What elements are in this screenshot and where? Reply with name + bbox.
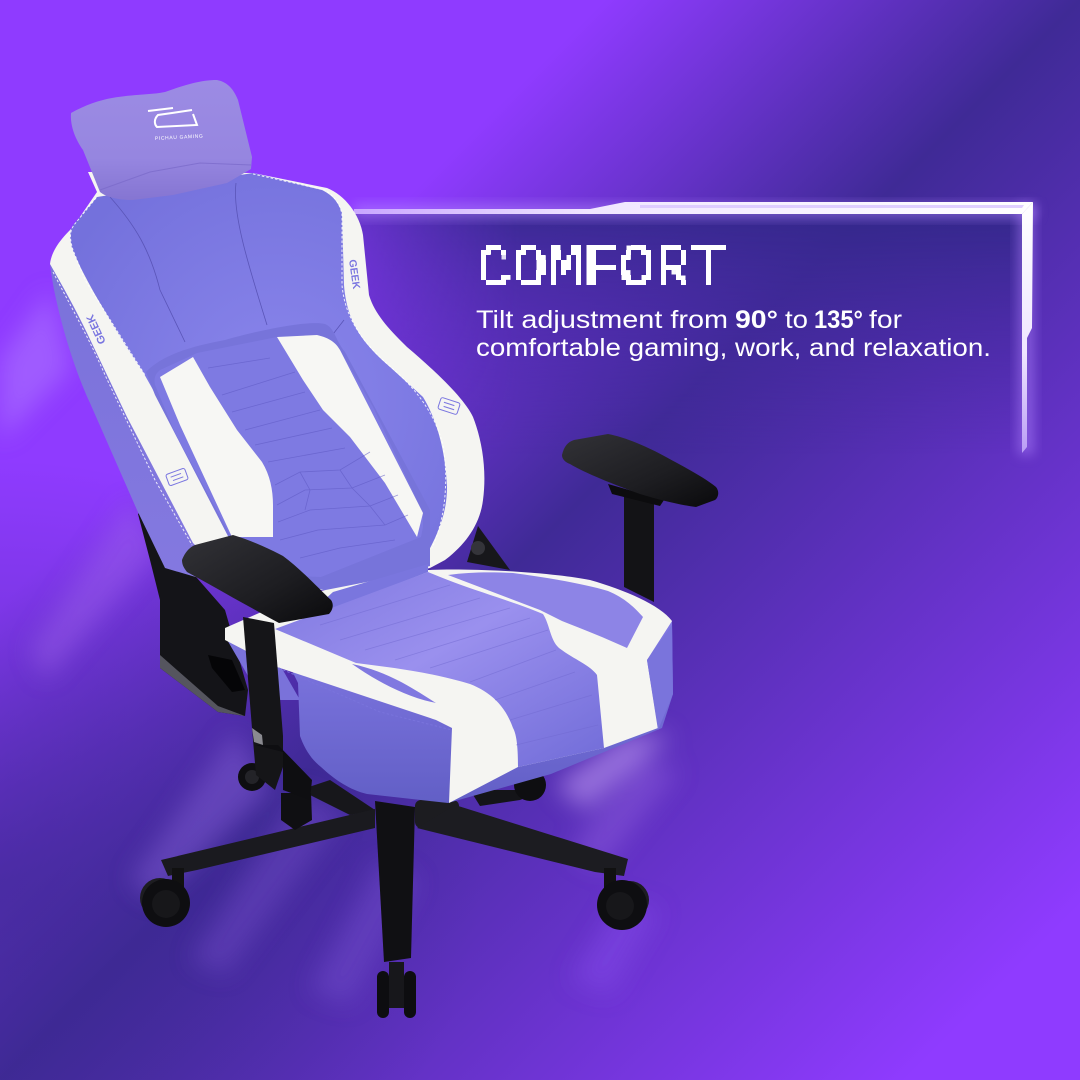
- chair: [50, 80, 718, 1018]
- GEEK label left: GEEK: [85, 312, 109, 346]
- title: COMFORT: [476, 237, 726, 305]
- rear leg: [300, 780, 375, 815]
- front leg: [375, 801, 415, 962]
- side stitching: [279, 668, 452, 730]
- seat side: [277, 621, 673, 803]
- right side panel: [647, 625, 673, 730]
- seat top white: [225, 569, 672, 803]
- GEEK label right: GEEK: [346, 259, 362, 290]
- description: 90°: [735, 306, 778, 334]
- icon: brand logo: [148, 108, 197, 127]
- description: comfortable gaming, work, and relaxation.: [476, 334, 991, 362]
- icon: logo badge right: [438, 397, 460, 415]
- white frame: [50, 172, 484, 590]
- mechanism under seat: [281, 793, 312, 830]
- rear tilt mechanism: [138, 503, 510, 716]
- left leg: [161, 809, 375, 876]
- left armrest: [182, 535, 333, 800]
- description: Tilt adjustment from: [476, 306, 728, 334]
- seat quilting: [320, 585, 598, 745]
- right leg: [417, 805, 628, 876]
- lumbar recess: [146, 323, 430, 592]
- backrest outer shell: [50, 264, 300, 590]
- seat right purple patch: [448, 572, 643, 648]
- text panel background: [356, 214, 1030, 396]
- brand text: PICHAU GAMING: [155, 133, 203, 142]
- back seams: [110, 183, 344, 342]
- right armrest: [562, 434, 718, 602]
- icon: logo badge left: [166, 468, 188, 486]
- left caster: [140, 868, 190, 927]
- gas lift: [415, 800, 459, 828]
- description: for: [869, 306, 902, 334]
- stitching: [53, 174, 446, 548]
- seat back: [50, 172, 484, 592]
- glowing frame: [354, 202, 1036, 455]
- lumbar quilting: [208, 358, 408, 558]
- description: [476, 306, 991, 362]
- front caster: [377, 962, 416, 1018]
- description: 135°: [814, 306, 863, 334]
- seat center purple: [275, 572, 604, 767]
- motion streaks behind chair: [0, 290, 680, 1005]
- icon: rear casters: [238, 763, 546, 801]
- under lumbar purple: [300, 564, 428, 622]
- headrest pillow: [71, 80, 252, 200]
- lumbar pillow: [155, 335, 423, 577]
- right caster: [597, 868, 649, 930]
- rear side of seat: [226, 638, 300, 700]
- chair base: [140, 763, 649, 1018]
- description: to: [785, 306, 808, 334]
- center back panel: [70, 173, 447, 585]
- purple wedge: [352, 664, 436, 703]
- seat cushion: [225, 564, 673, 803]
